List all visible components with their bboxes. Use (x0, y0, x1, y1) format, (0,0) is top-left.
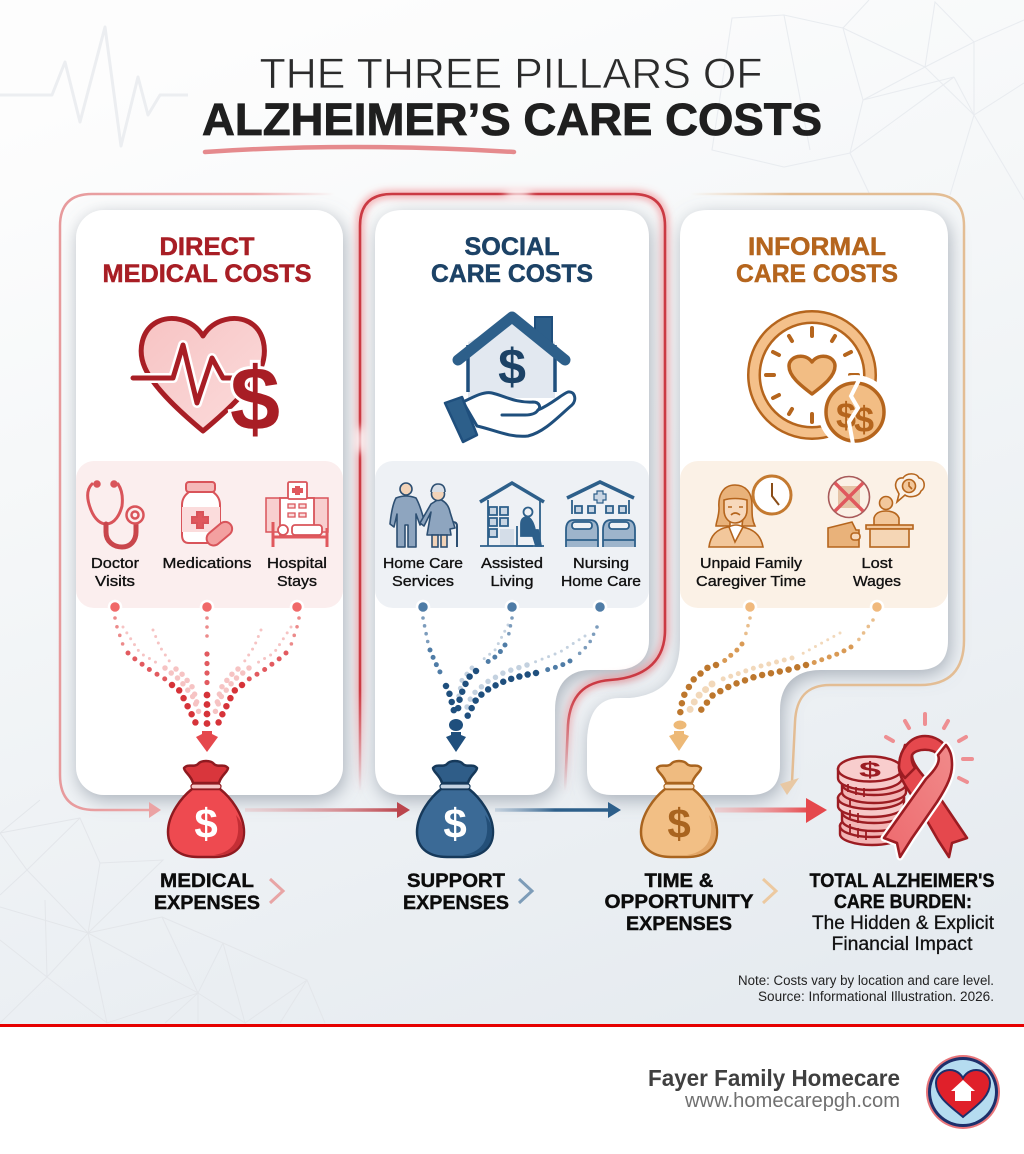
icon: nursing home (566, 482, 635, 547)
heading: informal care costs (736, 233, 898, 288)
background pattern: network bottom left (0, 800, 325, 1023)
arrowhead: medical line (149, 802, 161, 818)
icon: hospital with bed (266, 482, 328, 547)
heading: direct medical costs (102, 233, 312, 288)
title underline (205, 147, 514, 152)
frame: social red glow (360, 194, 665, 790)
labels: informal items: Unpaid Family (700, 555, 803, 572)
arrow: medical to support (245, 802, 410, 818)
icon: elderly couple (390, 483, 457, 547)
label: medical expenses (154, 870, 260, 914)
dots: informal origins (744, 601, 883, 613)
heading: direct medical costs: DIRECT (160, 233, 254, 261)
footer: brand text (648, 1065, 900, 1112)
heading: social care costs (431, 233, 593, 288)
labels: medical items: Visits (95, 573, 135, 590)
icon: support money bag (417, 761, 493, 857)
dots: social origins (417, 601, 606, 613)
label: total care burden: CARE BURDEN: (834, 891, 972, 913)
labels: social items: Services (392, 573, 454, 590)
labels: informal items (696, 555, 901, 590)
icon: medication bottle and pill (182, 482, 235, 548)
label: support expenses (403, 870, 509, 914)
footer: logo (926, 1055, 1000, 1129)
labels: medical items (91, 555, 327, 590)
labels: social items: Assisted (481, 555, 543, 572)
icon: stethoscope (88, 482, 144, 547)
icon: support money bag: $ (443, 800, 467, 847)
dotted flow: social (423, 618, 597, 717)
arrow: time to total (715, 798, 827, 823)
chevron: medical (270, 879, 283, 903)
band: informal items (680, 461, 948, 608)
label: time and opportunity expenses: TIME & (644, 870, 714, 892)
label: medical expenses: MEDICAL (160, 870, 254, 892)
label: medical expenses: EXPENSES (154, 892, 260, 914)
heading: informal care costs: CARE COSTS (736, 260, 898, 288)
labels: social items (383, 555, 641, 590)
title: ALZHEIMER’S CARE COSTS (202, 94, 822, 145)
icon: medical money bag (168, 761, 244, 857)
icon: coin stack: $ (859, 759, 882, 782)
labels: informal items: Caregiver Time (696, 573, 806, 590)
icon: assisted living building (480, 483, 544, 546)
note and source: Note: Costs vary by location and care level. (738, 973, 994, 988)
background pattern: heartbeat line (0, 27, 188, 146)
frame: medical flow line (60, 194, 335, 810)
heading: informal care costs: INFORMAL (748, 233, 886, 261)
labels: informal items: Lost (862, 555, 893, 572)
label: time and opportunity expenses: OPPORTUNITY (604, 891, 754, 913)
icon: coin stack (838, 756, 906, 845)
arrowhead: informal line (780, 778, 799, 795)
icon: clock with heart and broken coin: $ (836, 395, 856, 436)
label: time and opportunity expenses (604, 870, 754, 935)
panel: informal care costs (587, 210, 948, 795)
icon: house in hand with dollar (445, 317, 575, 442)
label: total care burden (810, 870, 995, 955)
arrowhead: social dots (446, 719, 466, 752)
chevron: time (763, 879, 776, 903)
icon: clock with heart and broken coin: $ (854, 399, 874, 440)
note and source (738, 973, 994, 1004)
panel: direct medical costs (76, 210, 343, 795)
dotted flow: medical (115, 618, 299, 726)
icon: clock with heart and broken coin (754, 317, 892, 449)
arrowhead: informal dots (669, 720, 689, 751)
icon: ribbon rays (886, 714, 972, 782)
frame: informal flow line (690, 194, 964, 782)
icon: house in hand with dollar: $ (498, 339, 526, 395)
band: medical items (76, 461, 343, 608)
labels: social items: Home Care (561, 573, 641, 590)
icon: heart with pulse and dollar: $ (230, 350, 280, 450)
labels: medical items: Doctor (91, 555, 139, 572)
labels: social items: Home Care (383, 555, 463, 572)
dots: medical origins (109, 601, 303, 613)
labels: medical items: Stays (277, 573, 317, 590)
title: THE THREE PILLARS OF (260, 50, 762, 98)
heading: social care costs: CARE COSTS (431, 260, 593, 288)
icon: medical money bag: $ (194, 800, 218, 847)
icon: time money bag: $ (667, 800, 691, 847)
icon: heart with pulse and dollar (133, 319, 280, 450)
label: total care burden: The Hidden & Explicit (812, 912, 995, 934)
icon: awareness ribbon (884, 736, 967, 857)
labels: medical items: Medications (162, 555, 252, 572)
label: support expenses: EXPENSES (403, 892, 509, 914)
arrow: support to time (495, 802, 621, 818)
footer: brand text: www.homecarepgh.com (684, 1090, 900, 1112)
title (202, 50, 822, 145)
footer: brand text: Fayer Family Homecare (648, 1065, 900, 1091)
label: time and opportunity expenses: EXPENSES (626, 913, 732, 935)
panel: social care costs (375, 210, 649, 795)
icon: lost wages desk and wallet (828, 474, 924, 547)
label: total care burden: TOTAL ALZHEIMER'S (810, 870, 994, 892)
icon: time money bag (641, 761, 717, 857)
heading: direct medical costs: MEDICAL COSTS (102, 260, 312, 288)
heading: social care costs: SOCIAL (464, 233, 560, 261)
chevron: support (519, 879, 532, 903)
labels: informal items: Wages (853, 573, 901, 590)
frame: social red line (360, 194, 665, 790)
label: support expenses: SUPPORT (407, 870, 505, 892)
icon: worried caregiver with clock (709, 476, 791, 547)
labels: social items: Nursing (573, 555, 629, 572)
note and source: Source: Informational Illustration. 2026. (758, 989, 994, 1004)
label: total care burden: Financial Impact (832, 933, 973, 955)
labels: social items: Living (490, 573, 534, 590)
frame: light sparkles on red line (356, 190, 532, 454)
arrowhead: medical dots (196, 731, 218, 752)
footer (0, 1024, 1024, 1154)
background pattern: network top right (712, 0, 1024, 200)
dotted flow: informal (680, 618, 873, 715)
band: social items (375, 461, 649, 608)
labels: medical items: Hospital (267, 555, 327, 572)
